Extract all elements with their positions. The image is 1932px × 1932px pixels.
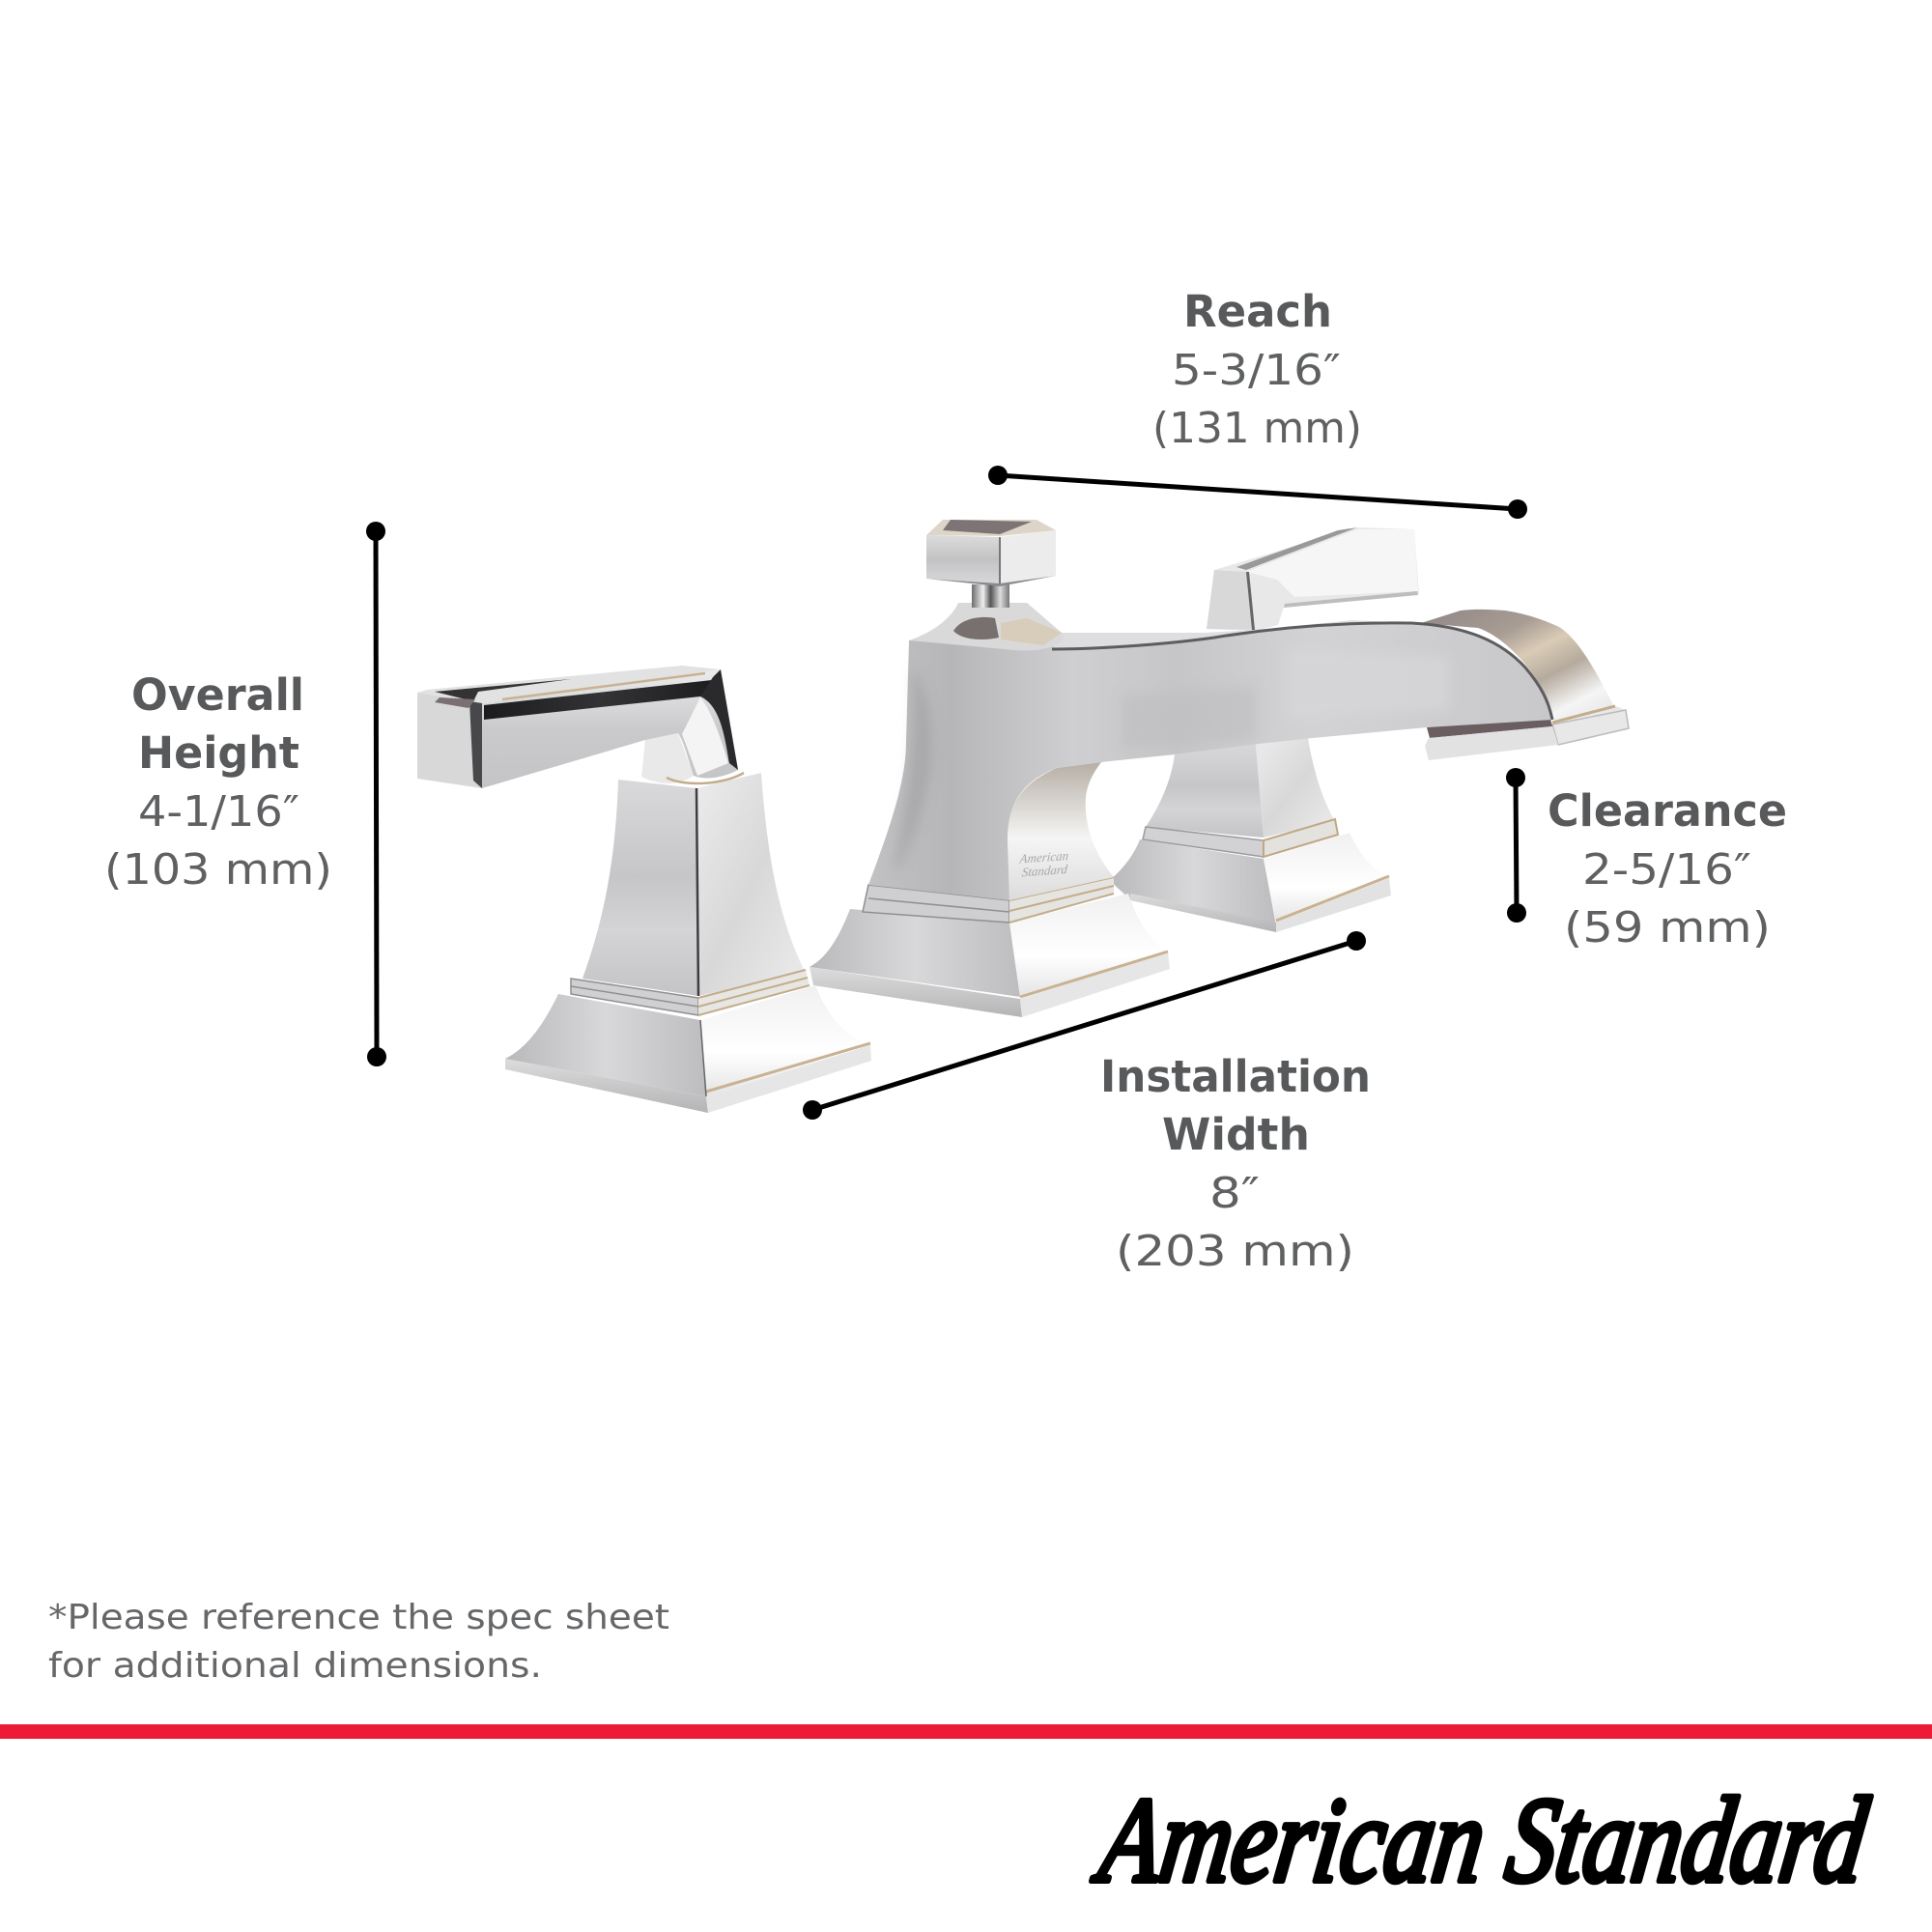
label: clearance: (59 mm) (1564, 903, 1771, 952)
footnote (48, 1598, 669, 1686)
label: reach: (131 mm) (1152, 404, 1362, 453)
label: installation width (1100, 1051, 1371, 1276)
back collar (1143, 827, 1264, 857)
label: reach: 5-3/16″ (1172, 346, 1341, 395)
centre collar (863, 885, 1009, 923)
centre body and spout (868, 623, 1552, 900)
footnote: for additional dimensions. (48, 1646, 542, 1686)
centre base (810, 877, 1170, 1017)
label: overall height: Overall (131, 669, 304, 721)
dimension: overall height (366, 522, 386, 1066)
illustration: three-piece faucet (417, 520, 1629, 1113)
back base (1111, 839, 1276, 925)
label: reach (1152, 286, 1362, 453)
logo stamp: American (1018, 848, 1069, 867)
spout end (1421, 610, 1629, 760)
label: installation width: Installation (1100, 1051, 1371, 1102)
collar (571, 979, 698, 1015)
label: installation width: (203 mm) (1116, 1227, 1354, 1276)
column (582, 780, 698, 996)
dimension: installation width (803, 931, 1366, 1120)
lever collar (667, 773, 744, 783)
footnote: *Please reference the spec sheet (48, 1598, 669, 1637)
stem (972, 584, 1009, 608)
logo stamp (1017, 848, 1070, 880)
base (505, 994, 706, 1096)
label: clearance: 2-5/16″ (1582, 845, 1751, 895)
lever stem (641, 733, 694, 783)
front left handle (417, 666, 871, 1113)
spout top surface (1052, 620, 1411, 649)
label: overall height: Height (138, 727, 299, 779)
label: overall height (104, 669, 332, 895)
dimension: reach (988, 466, 1527, 519)
back column (1146, 744, 1264, 838)
spout dark rim (1052, 623, 1552, 720)
label: overall height: (103 mm) (104, 845, 332, 895)
soft reflections (894, 647, 1449, 869)
lever (482, 669, 738, 788)
knob (926, 520, 1056, 586)
dimension: clearance (1506, 768, 1526, 923)
arch interior (1008, 762, 1114, 900)
back handle (1111, 527, 1419, 932)
label: installation width: 8″ (1209, 1169, 1260, 1218)
label: clearance (1548, 785, 1787, 952)
neck (909, 603, 1064, 651)
label: reach: Reach (1183, 286, 1332, 337)
label: installation width: Width (1162, 1109, 1310, 1160)
back lever (1207, 527, 1419, 631)
label: overall height: 4-1/16″ (138, 787, 299, 837)
logo stamp: Standard (1021, 862, 1068, 879)
label: clearance: Clearance (1548, 785, 1787, 837)
red divider bar (0, 1724, 1932, 1739)
